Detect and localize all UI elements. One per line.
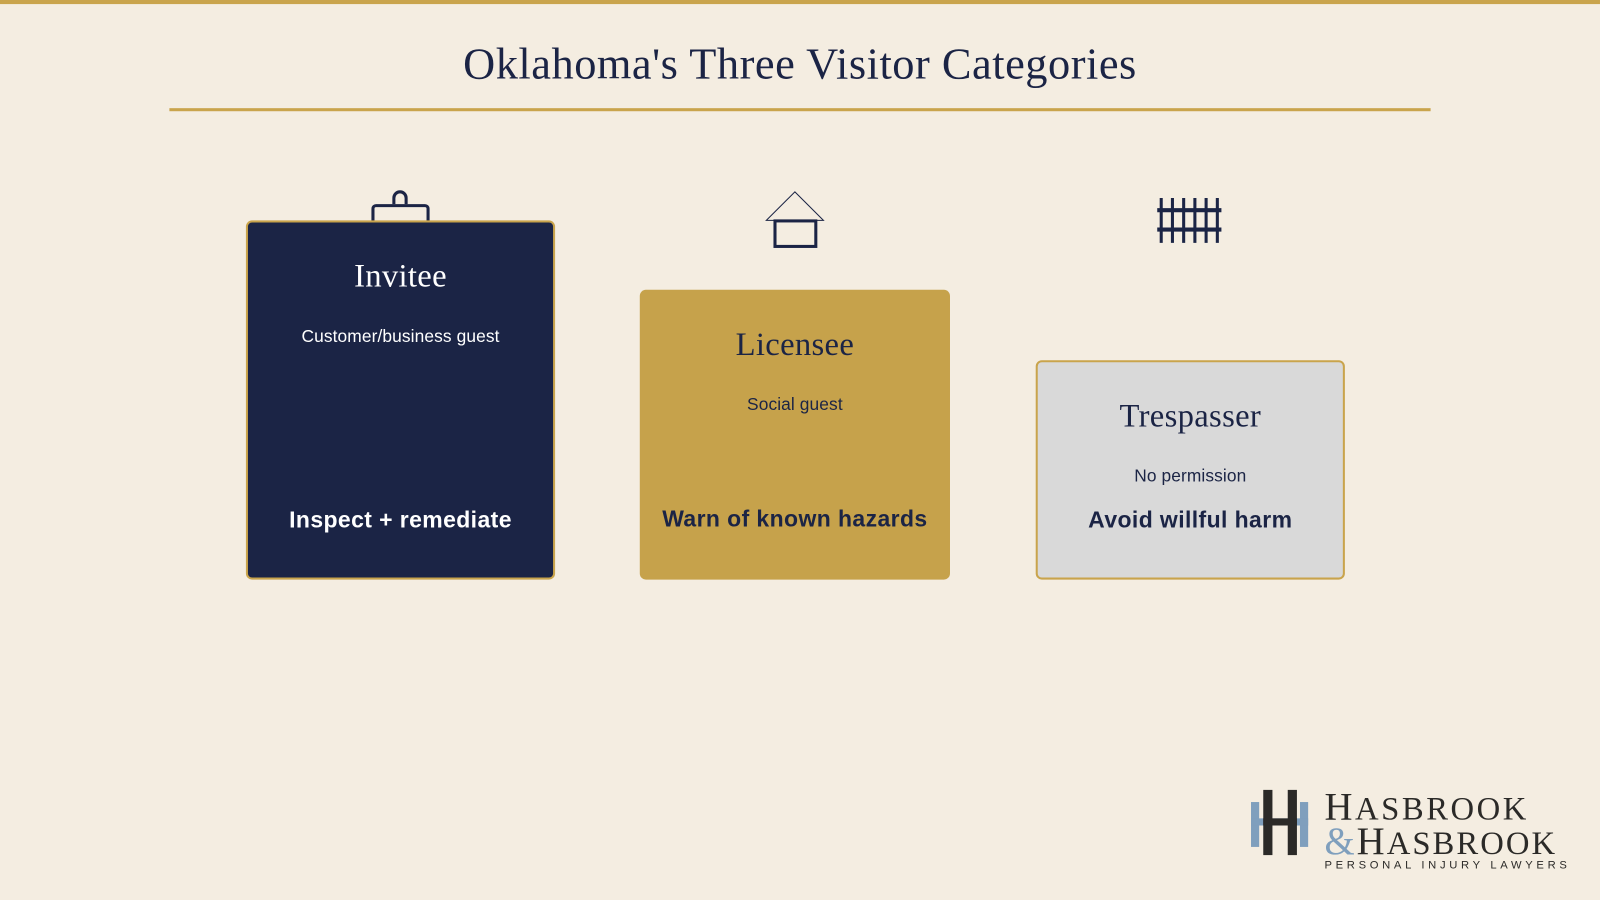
heading: licensee: Licensee [736,326,854,362]
icon: fence [1157,198,1222,243]
text: licensee sub: Social guest [747,395,843,414]
panel: licensee [640,290,950,580]
icon: house [765,191,825,248]
heading: trespasser: Trespasser [1120,397,1261,434]
icon: briefcase [371,190,430,220]
text: trespasser sub: No permission [1134,466,1246,486]
top bar [0,0,1600,4]
logo: &HASBROOK [1324,820,1557,863]
panel: trespasser [1036,360,1345,580]
text: invitee sub: Customer/business guest [301,327,500,346]
logo: PERSONAL INJURY LAWYERS [1324,859,1571,871]
logo [1251,786,1571,871]
title: Oklahoma's Three Visitor Categories [463,40,1137,89]
logo: HASBROOK [1324,786,1529,829]
panel: invitee [246,220,555,580]
text: trespasser duty: Avoid willful harm [1088,507,1292,533]
text: invitee duty: Inspect + remediate [289,507,512,533]
heading: invitee: Invitee [354,257,447,294]
text: licensee duty: Warn of known hazards [662,506,928,532]
